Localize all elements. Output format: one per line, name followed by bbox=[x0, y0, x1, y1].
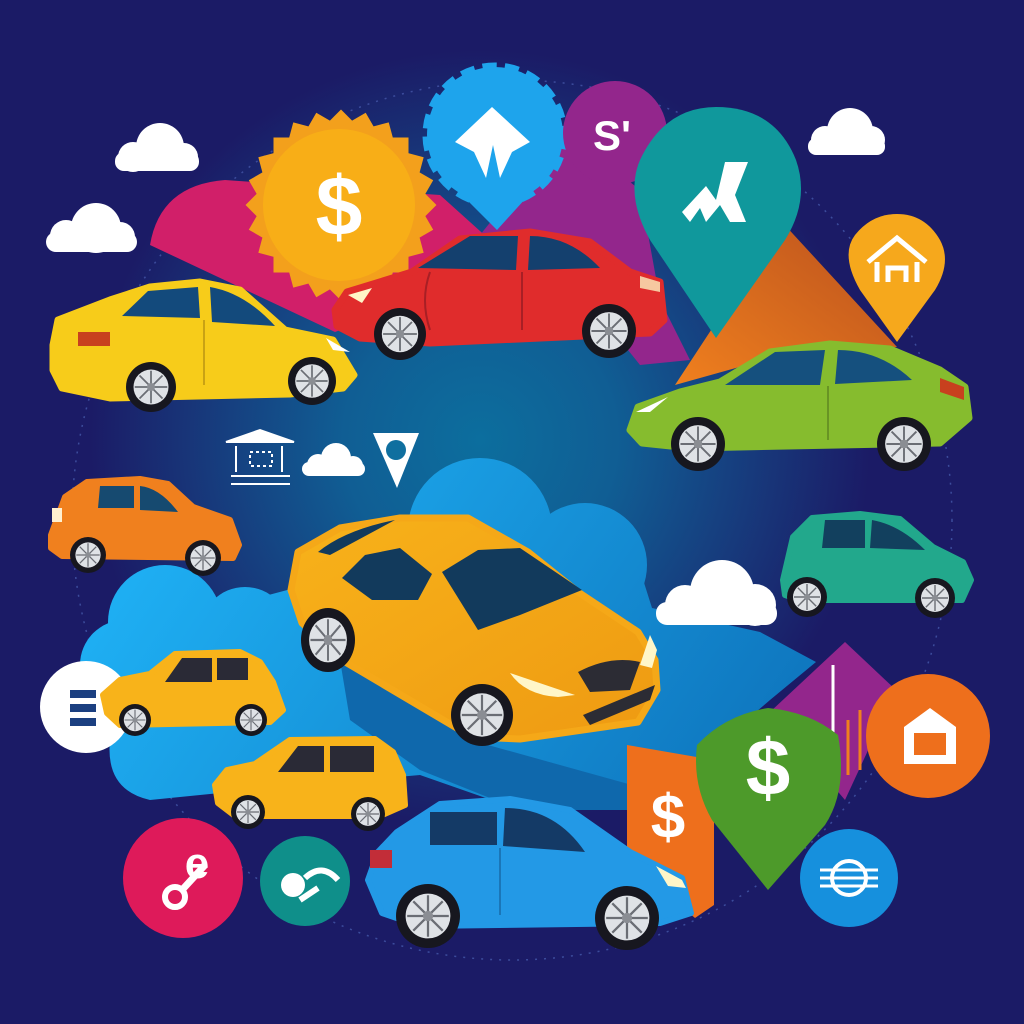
car: yellow sedan bbox=[53, 282, 354, 412]
icon: sun with dollar bbox=[246, 110, 436, 300]
icon: white circle left bbox=[40, 661, 132, 753]
dotted orbit ring bbox=[72, 80, 952, 960]
icon: green dollar pin: $ bbox=[746, 723, 790, 812]
icon: blue badge pin bbox=[427, 67, 563, 230]
shape: purple hill bbox=[480, 130, 690, 365]
cloud: top right bbox=[808, 108, 885, 155]
icon: teal location pin bbox=[634, 107, 801, 338]
icon: magenta circle key: e bbox=[185, 839, 209, 888]
cloud: small centre bbox=[302, 443, 365, 476]
shape: orange triangle bbox=[675, 222, 897, 385]
icon: purple circle: S' bbox=[593, 112, 631, 159]
car: orange hatchback bbox=[51, 479, 239, 576]
car: teal hatchback bbox=[783, 514, 971, 618]
car: blue sedan bbox=[368, 799, 691, 950]
icon: bank building bbox=[226, 430, 294, 484]
icon: green dollar pin bbox=[696, 708, 841, 890]
cloud: left bbox=[46, 203, 137, 253]
car: red sedan bbox=[335, 232, 664, 360]
chart: spikes bbox=[833, 665, 860, 775]
icon: orange flag with dollar: $ bbox=[651, 783, 685, 852]
blue cloud backdrop bbox=[80, 458, 816, 810]
icon: orange house circle bbox=[866, 674, 990, 798]
cloud: mid right bbox=[656, 560, 777, 626]
shape: purple triangle bbox=[770, 642, 896, 800]
central glow bbox=[90, 50, 870, 830]
car: green sedan bbox=[630, 344, 969, 471]
icon: sun with dollar: $ bbox=[316, 159, 362, 253]
car shadow on cloud bbox=[340, 660, 650, 810]
cloud: top left bbox=[115, 123, 199, 172]
icon: purple circle bbox=[563, 81, 667, 185]
icon: orange flag with dollar bbox=[627, 745, 714, 918]
car: small yellow hatchback bbox=[103, 652, 283, 736]
icon: magenta circle key bbox=[123, 818, 243, 938]
icon: blue engine circle bbox=[800, 829, 898, 927]
car: large yellow centre car bbox=[291, 518, 657, 746]
icon: yellow house pin bbox=[849, 214, 945, 342]
icon: white location pin bbox=[373, 433, 419, 488]
car: lower yellow hatchback bbox=[215, 739, 405, 831]
icon: teal circle bbox=[260, 836, 350, 926]
shape: magenta hill bbox=[150, 180, 490, 332]
